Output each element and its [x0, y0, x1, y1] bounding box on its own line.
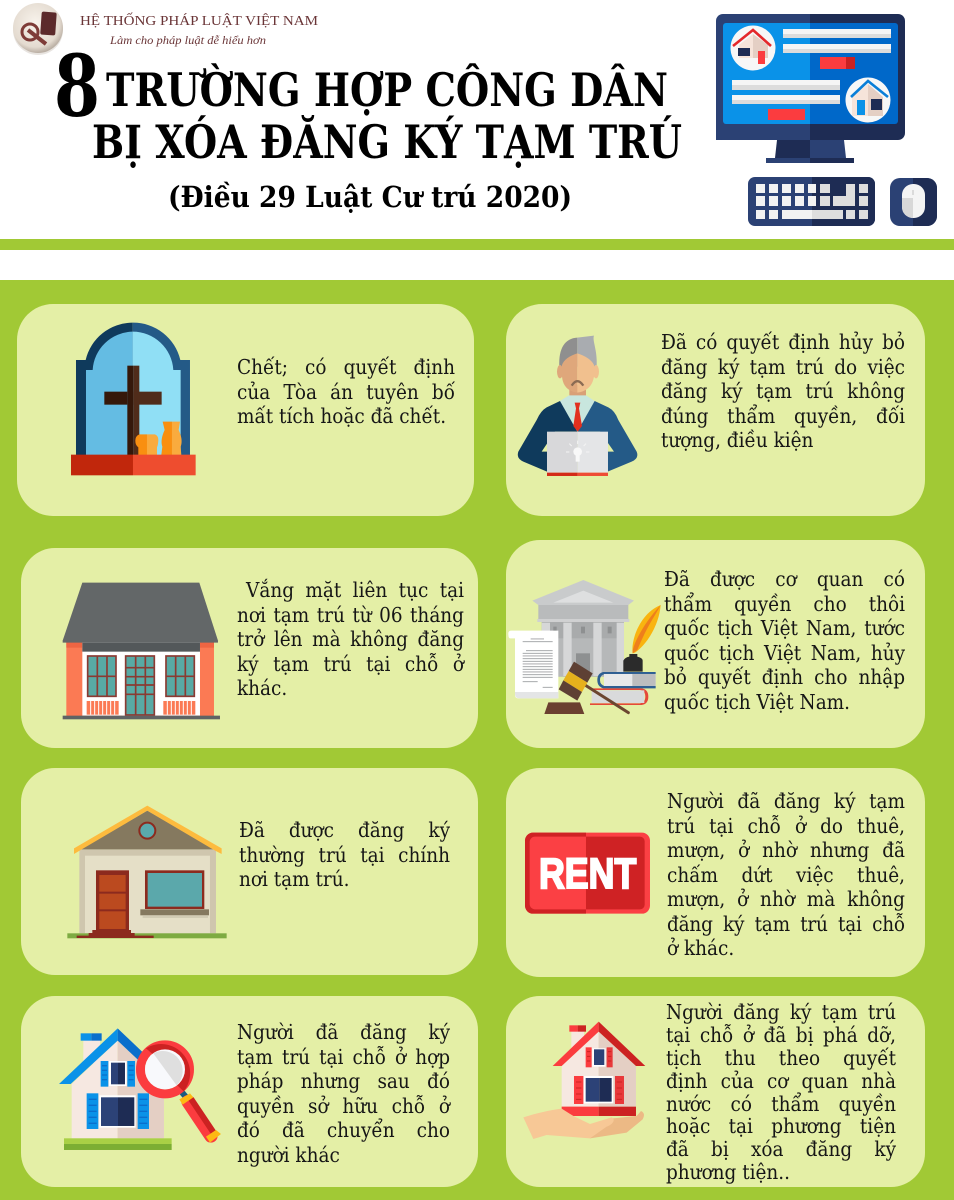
- header green bar: [0, 239, 954, 250]
- text: card 1: mất tích hoặc đã chết.: [237, 404, 446, 428]
- green background panel: [0, 280, 954, 1200]
- text: card 4: bỏ quyết định cho nhập: [664, 665, 905, 689]
- icon: mouse: [890, 178, 937, 226]
- text: card 5: Đã được đăng ký: [239, 818, 450, 842]
- logo slogan: Làm cho pháp luật dễ hiểu hơn: [109, 34, 266, 47]
- panel: card 3: [21, 548, 478, 748]
- icon: rent sign: RENT: [539, 850, 636, 898]
- text: card 2: [661, 330, 905, 452]
- text: card 8: tại chỗ ở đã bị phá dỡ,: [666, 1023, 896, 1047]
- panel: card 6: [506, 768, 925, 977]
- text: card 8: hoặc tại phương tiện: [666, 1114, 896, 1138]
- text: card 5: thường trú tại chính: [239, 843, 450, 867]
- text: card 7: người khác: [237, 1143, 340, 1167]
- text: card 4: Đã được cơ quan có: [664, 567, 905, 591]
- text: card 3: Vắng mặt liên tục tại: [246, 578, 464, 602]
- text: card 4: [664, 567, 905, 714]
- text: card 8: [666, 1000, 896, 1184]
- text: card 8: nước có thẩm quyền: [666, 1092, 896, 1116]
- logo name: HỆ THỐNG PHÁP LUẬT VIỆT NAM: [80, 13, 318, 28]
- icon: hand holding house: [523, 1022, 645, 1139]
- icon: keyboard: [748, 177, 875, 226]
- text: card 8: định của cơ quan nhà: [666, 1069, 896, 1093]
- text: card 6: trú tại chỗ ở do thuê,: [667, 814, 905, 838]
- panel: card 7: [21, 996, 478, 1187]
- icon: window with cross: [71, 323, 196, 475]
- title numeral: 8: [54, 37, 100, 137]
- panel: card 8: [506, 996, 925, 1187]
- icon: man with laptop: [518, 336, 637, 476]
- text: card 7: [237, 1020, 451, 1167]
- text: card 3: ký tạm trú tại chỗ ở: [237, 652, 464, 676]
- text: card 3: trở lên mà không đăng: [237, 627, 464, 651]
- icon: beige house: [67, 806, 227, 938]
- text: card 4: quốc tịch Việt Nam, tước: [664, 616, 905, 640]
- icon: house with magnifier: [59, 1028, 221, 1150]
- panel: card 4: [506, 540, 925, 748]
- panel: card 1: [17, 304, 474, 516]
- text: card 8: phương tiện..: [666, 1160, 790, 1184]
- text: card 7: đó đã chuyển cho: [237, 1118, 450, 1142]
- text: card 8: Người đăng ký tạm trú: [666, 1000, 896, 1024]
- text: card 3: khác.: [237, 676, 287, 700]
- text: card 6: đăng ký tạm trú tại chỗ: [667, 912, 905, 936]
- text: card 1: của Tòa án tuyên bố: [237, 380, 455, 404]
- text: card 4: thẩm quyền cho thôi: [664, 592, 905, 616]
- text: card 5: nơi tạm trú.: [239, 867, 349, 891]
- text: card 1: [237, 355, 455, 428]
- text: card 6: chấm dứt việc thuê,: [667, 863, 905, 887]
- icon: rent sign: [525, 833, 650, 914]
- text: card 6: Người đã đăng ký tạm: [667, 789, 905, 813]
- subtitle: (Điều 29 Luật Cư trú 2020): [168, 180, 572, 214]
- icon: computer monitor: [716, 14, 905, 163]
- text: card 3: [237, 578, 465, 700]
- text: card 2: tượng, điều kiện: [661, 428, 813, 452]
- logo: [13, 3, 63, 55]
- text: card 3: nơi tạm trú từ 06 tháng: [237, 603, 464, 627]
- text: card 6: mượn, ở nhờ nhưng đã: [667, 838, 905, 862]
- text: card 8: đã bị xóa đăng ký: [666, 1137, 896, 1161]
- text: card 4: quốc tịch Việt Nam.: [664, 690, 850, 714]
- title line 1: TRƯỜNG HỢP CÔNG DÂN: [106, 62, 668, 117]
- text: card 8: tịch thu theo quyết: [666, 1046, 896, 1070]
- text: card 7: pháp nhưng sau đó: [237, 1069, 450, 1093]
- text: card 7: quyền sở hữu chỗ ở: [237, 1094, 450, 1118]
- text: card 7: tạm trú tại chỗ ở hợp: [237, 1045, 450, 1069]
- panel: card 2: [506, 304, 925, 516]
- icon: gray roof house: [63, 583, 220, 719]
- text: card 6: [667, 789, 905, 960]
- text: card 5: [239, 818, 450, 891]
- text: card 6: mượn, ở nhờ mà không: [667, 887, 905, 911]
- text: card 2: đăng ký tạm trú không: [661, 379, 905, 403]
- text: card 4: quốc tịch Việt Nam, hủy: [664, 641, 905, 665]
- text: card 2: đúng thẩm quyền, đối: [661, 404, 905, 428]
- text: card 7: Người đã đăng ký: [237, 1020, 450, 1044]
- title line 2: BỊ XÓA ĐĂNG KÝ TẠM TRÚ: [92, 114, 682, 169]
- text: card 2: Đã có quyết định hủy bỏ: [661, 330, 905, 354]
- panel: card 5: [21, 768, 478, 975]
- text: card 1: Chết; có quyết định: [237, 355, 455, 379]
- icon: courthouse with gavel and books: [508, 580, 661, 714]
- text: card 6: ở khác.: [667, 936, 734, 960]
- text: card 2: đăng ký tạm trú do việc: [661, 355, 905, 379]
